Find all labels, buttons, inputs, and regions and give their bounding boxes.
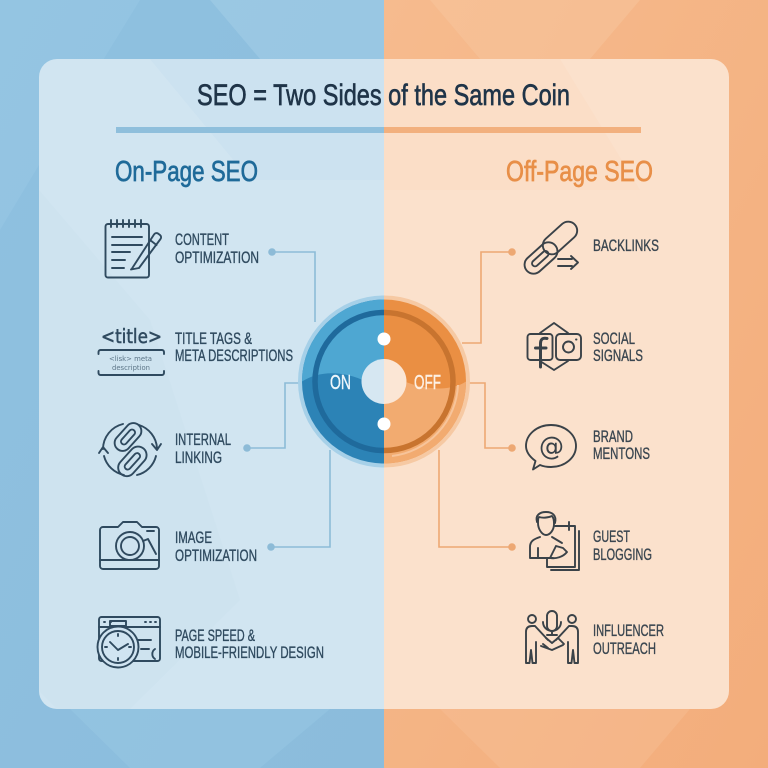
label: CONTENT [175,231,229,249]
label: GUEST [593,528,630,546]
icon: chain link with arrow [521,218,581,277]
icon: camera [100,522,159,569]
label: BRAND [593,428,633,446]
label: INTERNAL [175,431,231,449]
icon: two people shaking hands with microphone [526,611,578,663]
icon: notepad and pencil [106,220,161,278]
label: SOCIAL [593,330,635,348]
label [175,431,231,467]
item: internal linking [99,420,231,480]
label: OUTREACH [593,640,656,658]
connector: image optimization [267,450,330,551]
item: guest blogging [530,512,652,570]
item: content optimization [106,220,259,278]
label: META DESCRIPTIONS [175,347,293,365]
connector: content optimization [268,248,315,322]
label: SIGNALS [593,347,643,365]
label: OPTIMIZATION [175,249,259,267]
label: OPTIMIZATION [175,547,257,565]
label [175,330,293,365]
icon: title tag snippet: <lisk> meta [109,355,152,363]
label [593,622,664,658]
main translucent card [39,59,729,709]
heading: On-Page SEO: On-Page SEO [115,156,258,188]
icon: person with notebook [530,512,579,570]
icon: title tag snippet: description [112,364,150,372]
label: TITLE TAGS & [175,330,252,348]
center coin: ON / OFF: ON [330,372,351,394]
connector: brand mentions [468,383,516,452]
heading: Off-Page SEO: Off-Page SEO [506,156,653,188]
center coin: ON / OFF [298,296,470,468]
label: INFLUENCER [593,622,664,640]
item: title tags and meta descriptions [98,325,293,375]
label: LINKING [175,449,222,467]
icon: title tag snippet: <title> [101,325,162,348]
label: BLOGGING [593,546,652,564]
label [175,627,324,662]
connector: backlinks [462,248,516,343]
icon: chain links with circular arrows [99,420,161,480]
label [593,428,650,463]
label: PAGE SPEED & [175,627,255,645]
center coin: ON / OFF: OFF [414,372,441,394]
item: image optimization [100,522,257,569]
label: IMAGE [175,529,212,547]
label [175,231,259,267]
label: MENTONS [593,445,650,463]
item: influencer outreach [526,611,664,663]
label: MOBILE-FRIENDLY DESIGN [175,644,324,662]
icon: facebook and instagram in hexagon [528,323,581,370]
label: BACKLINKS [593,237,659,255]
title: SEO = Two Sides of the Same Coin [197,79,570,112]
item: brand mentions [526,425,650,470]
title divider rule [116,127,641,133]
connector: internal linking [243,383,302,452]
icon: speech bubble with at sign: @ [539,432,564,462]
icon: browser window and stopwatch [98,617,160,668]
item: social signals [528,323,643,370]
icon: title tag snippet [98,325,164,375]
connector: guest blogging [439,450,516,551]
label [175,529,257,565]
item: page speed and mobile-friendly design [98,617,324,668]
label [593,528,652,564]
item: backlinks [521,218,659,277]
label [593,330,643,365]
